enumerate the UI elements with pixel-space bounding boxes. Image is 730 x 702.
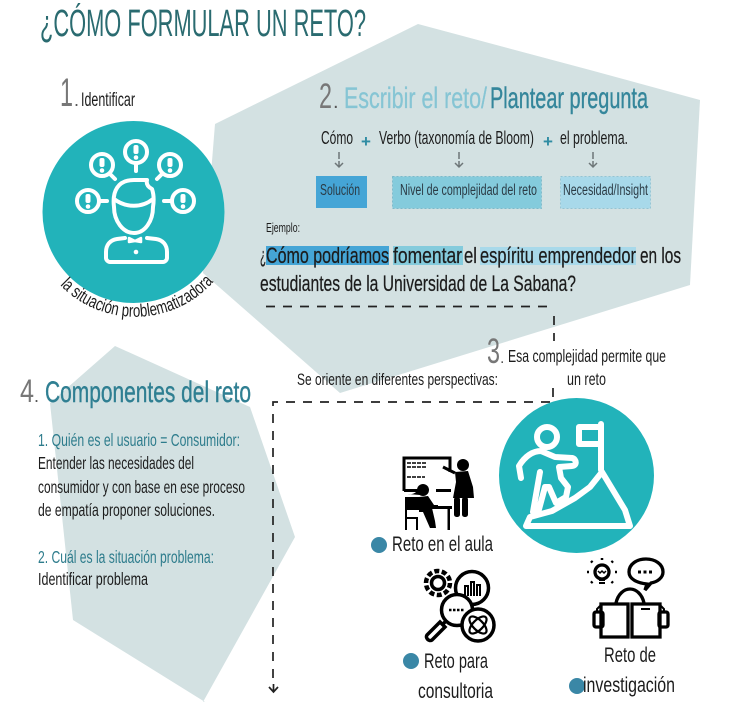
heading: step 2 bbox=[319, 77, 648, 116]
box: Necesidad/Insight bbox=[560, 176, 650, 208]
heading: step 4 bbox=[20, 373, 251, 409]
formula row bbox=[321, 127, 628, 151]
text: perspectives: Se oriente en diferentes perspectivas: bbox=[297, 370, 498, 389]
formula row: el problema. bbox=[560, 127, 628, 148]
example question with highlights: en los bbox=[640, 243, 681, 268]
icon: classroom bbox=[404, 458, 474, 530]
box: Solución: Solución bbox=[320, 182, 360, 199]
label: Reto para consultoria: Reto para bbox=[424, 650, 488, 673]
label: Ejemplo: Ejemplo: bbox=[266, 221, 300, 235]
heading: step 1 bbox=[60, 71, 135, 115]
icon: climber reaching flag bbox=[499, 398, 654, 553]
example question with highlights: el bbox=[464, 243, 477, 268]
example question with highlights: espíritu emprendedor bbox=[480, 243, 636, 268]
formula row: Verbo (taxonomía de Bloom) bbox=[379, 127, 534, 148]
text: step 3: un reto bbox=[567, 369, 606, 389]
heading: step 1: Identificar bbox=[81, 90, 135, 111]
panel: gray shape behind step 4 bbox=[50, 346, 295, 702]
formula row: + bbox=[543, 132, 553, 151]
text block: components of the challenge: consumidor y con base en ese proceso bbox=[38, 477, 245, 497]
box: Necesidad/Insight: Necesidad/Insight bbox=[563, 182, 648, 199]
example question with highlights: ¿ bbox=[260, 243, 266, 268]
example question with highlights: fomentar bbox=[393, 243, 462, 268]
heading: step 2: . bbox=[333, 91, 339, 113]
heading: step 2: Plantear pregunta bbox=[490, 82, 648, 115]
heading: step 1: 1 bbox=[60, 71, 73, 115]
example question with highlights: Cómo podríamos bbox=[266, 243, 389, 268]
box: Nivel de complejidad del reto: Nivel de complejidad del reto bbox=[400, 182, 537, 199]
icon: consulting magnifier bbox=[426, 571, 494, 641]
text: step 3: Esa complejidad permite que bbox=[508, 346, 666, 366]
label: Reto en el aula bbox=[371, 533, 493, 556]
box: Solución bbox=[316, 176, 367, 208]
heading: step 4: 4 bbox=[20, 373, 34, 409]
icon: person with alert bubbles bbox=[42, 121, 224, 303]
formula row: + bbox=[361, 132, 371, 151]
heading: step 4: Componentes del reto bbox=[45, 376, 251, 409]
example question with highlights bbox=[260, 243, 681, 296]
heading: step 4: . bbox=[34, 386, 39, 406]
text block: components of the challenge bbox=[38, 430, 245, 589]
text block: components of the challenge: 1. Quién es el usuario = Consumidor: bbox=[38, 430, 240, 450]
heading: step 1: . bbox=[74, 90, 79, 110]
example question with highlights: estudiantes de la Universidad de La Sabana? bbox=[260, 271, 576, 296]
text block: components of the challenge: 2. Cuál es la situación problema: bbox=[38, 547, 214, 567]
text: step 3: . bbox=[500, 350, 504, 367]
panel: gray shape behind step 2 bbox=[203, 24, 700, 393]
title: ¿CÓMO FORMULAR UN RETO? bbox=[40, 2, 366, 45]
heading: step 2: 2 bbox=[319, 77, 332, 116]
label: Reto de investigación: investigación bbox=[583, 674, 675, 697]
arrows: formula to boxes bbox=[335, 152, 597, 167]
formula row: Cómo bbox=[321, 127, 353, 148]
box: Nivel de complejidad del reto bbox=[392, 176, 542, 208]
dashed connector with arrow to bottom bbox=[269, 388, 553, 692]
text block: components of the challenge: Entender las necesidades del bbox=[38, 453, 194, 473]
dashed connector: question to step 3 bbox=[266, 306, 554, 341]
icon: research reader bbox=[587, 558, 668, 637]
text block: components of the challenge: de empatía proponer soluciones. bbox=[38, 500, 215, 520]
text: step 3 bbox=[487, 332, 666, 389]
label: Reto de investigación bbox=[569, 644, 675, 697]
heading: step 2: Escribir el reto/ bbox=[344, 82, 487, 115]
label: Reto en el aula: Reto en el aula bbox=[392, 533, 493, 556]
label: Reto de investigación: Reto de bbox=[604, 644, 656, 667]
text: step 3: 3 bbox=[487, 332, 500, 371]
text block: components of the challenge: Identificar problema bbox=[38, 569, 148, 589]
label: Reto para consultoria bbox=[403, 650, 493, 702]
curved label: la situación problematizadora: la situación problematizadora bbox=[60, 276, 214, 320]
